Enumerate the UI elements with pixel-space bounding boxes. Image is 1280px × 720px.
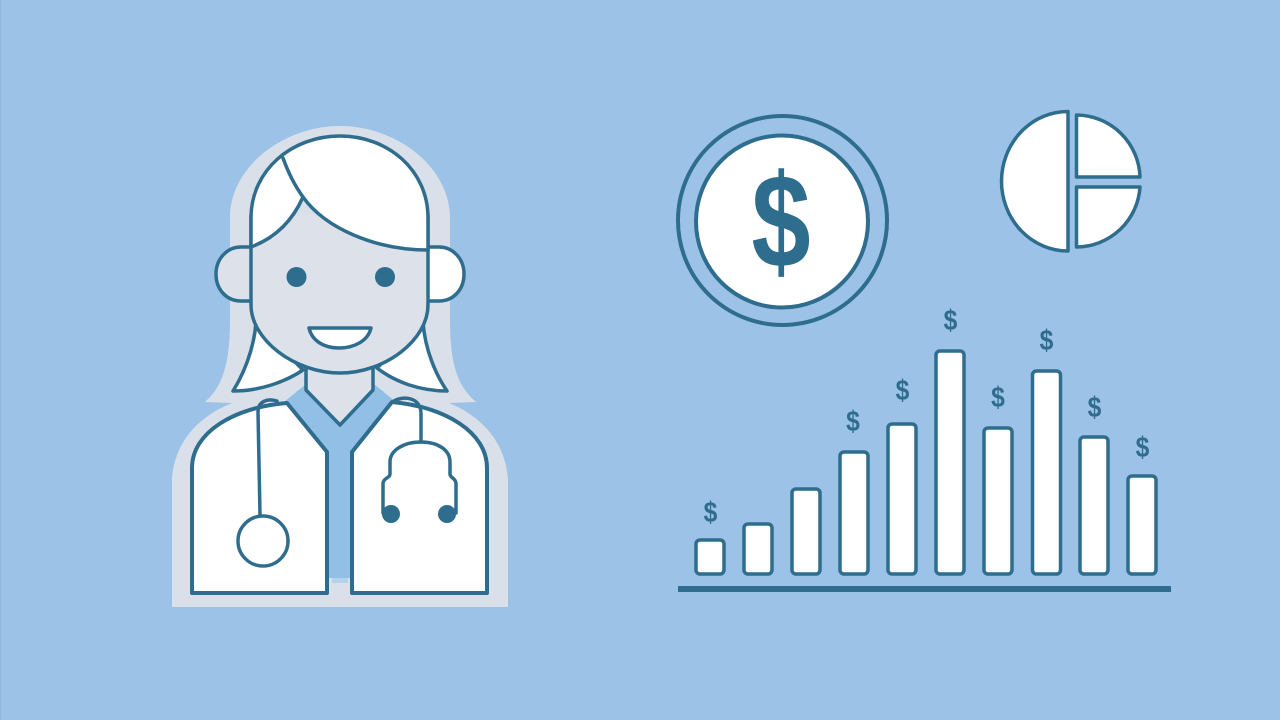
- dollar labels: $: [991, 381, 1005, 413]
- lower hair left: [233, 322, 303, 391]
- coin dollar sign: $: [751, 147, 811, 296]
- dollar coin icon: [678, 116, 887, 325]
- blue shirt: [284, 384, 396, 578]
- left coat panel: [192, 403, 327, 593]
- left ear: [216, 247, 252, 301]
- chart baseline: [678, 586, 1171, 592]
- coin face: [696, 136, 868, 308]
- bars: [696, 351, 1156, 574]
- dollar labels: $: [1088, 391, 1101, 423]
- doctor figure: [172, 126, 508, 607]
- right coat panel: [352, 402, 487, 593]
- pie chart icon: [1002, 112, 1140, 251]
- dollar labels: $: [944, 304, 957, 336]
- dollar labels: $: [1136, 431, 1149, 463]
- coin outer ring: [678, 116, 887, 325]
- stethoscope ear piece: [382, 398, 456, 523]
- left eye: [286, 267, 306, 287]
- top right slice: [1076, 115, 1140, 177]
- dollar labels: [704, 304, 1149, 528]
- lower hair right: [377, 322, 447, 391]
- smile: [309, 328, 371, 348]
- bar chart: [678, 304, 1171, 592]
- hair: [251, 136, 428, 250]
- stethoscope chest piece and tube: [238, 400, 288, 566]
- bottom right slice: [1076, 187, 1140, 247]
- doctor light halo: [172, 126, 508, 607]
- dollar labels: $: [846, 405, 860, 437]
- shirt hem: [332, 578, 348, 583]
- face: [251, 215, 428, 373]
- dollar labels: $: [1040, 324, 1053, 356]
- right ear: [428, 247, 464, 301]
- neck: [306, 366, 373, 425]
- half slice: [1002, 112, 1068, 251]
- right eye: [375, 267, 395, 287]
- hair parting: [283, 158, 303, 197]
- dollar labels: $: [896, 374, 909, 406]
- dollar labels: $: [704, 496, 717, 528]
